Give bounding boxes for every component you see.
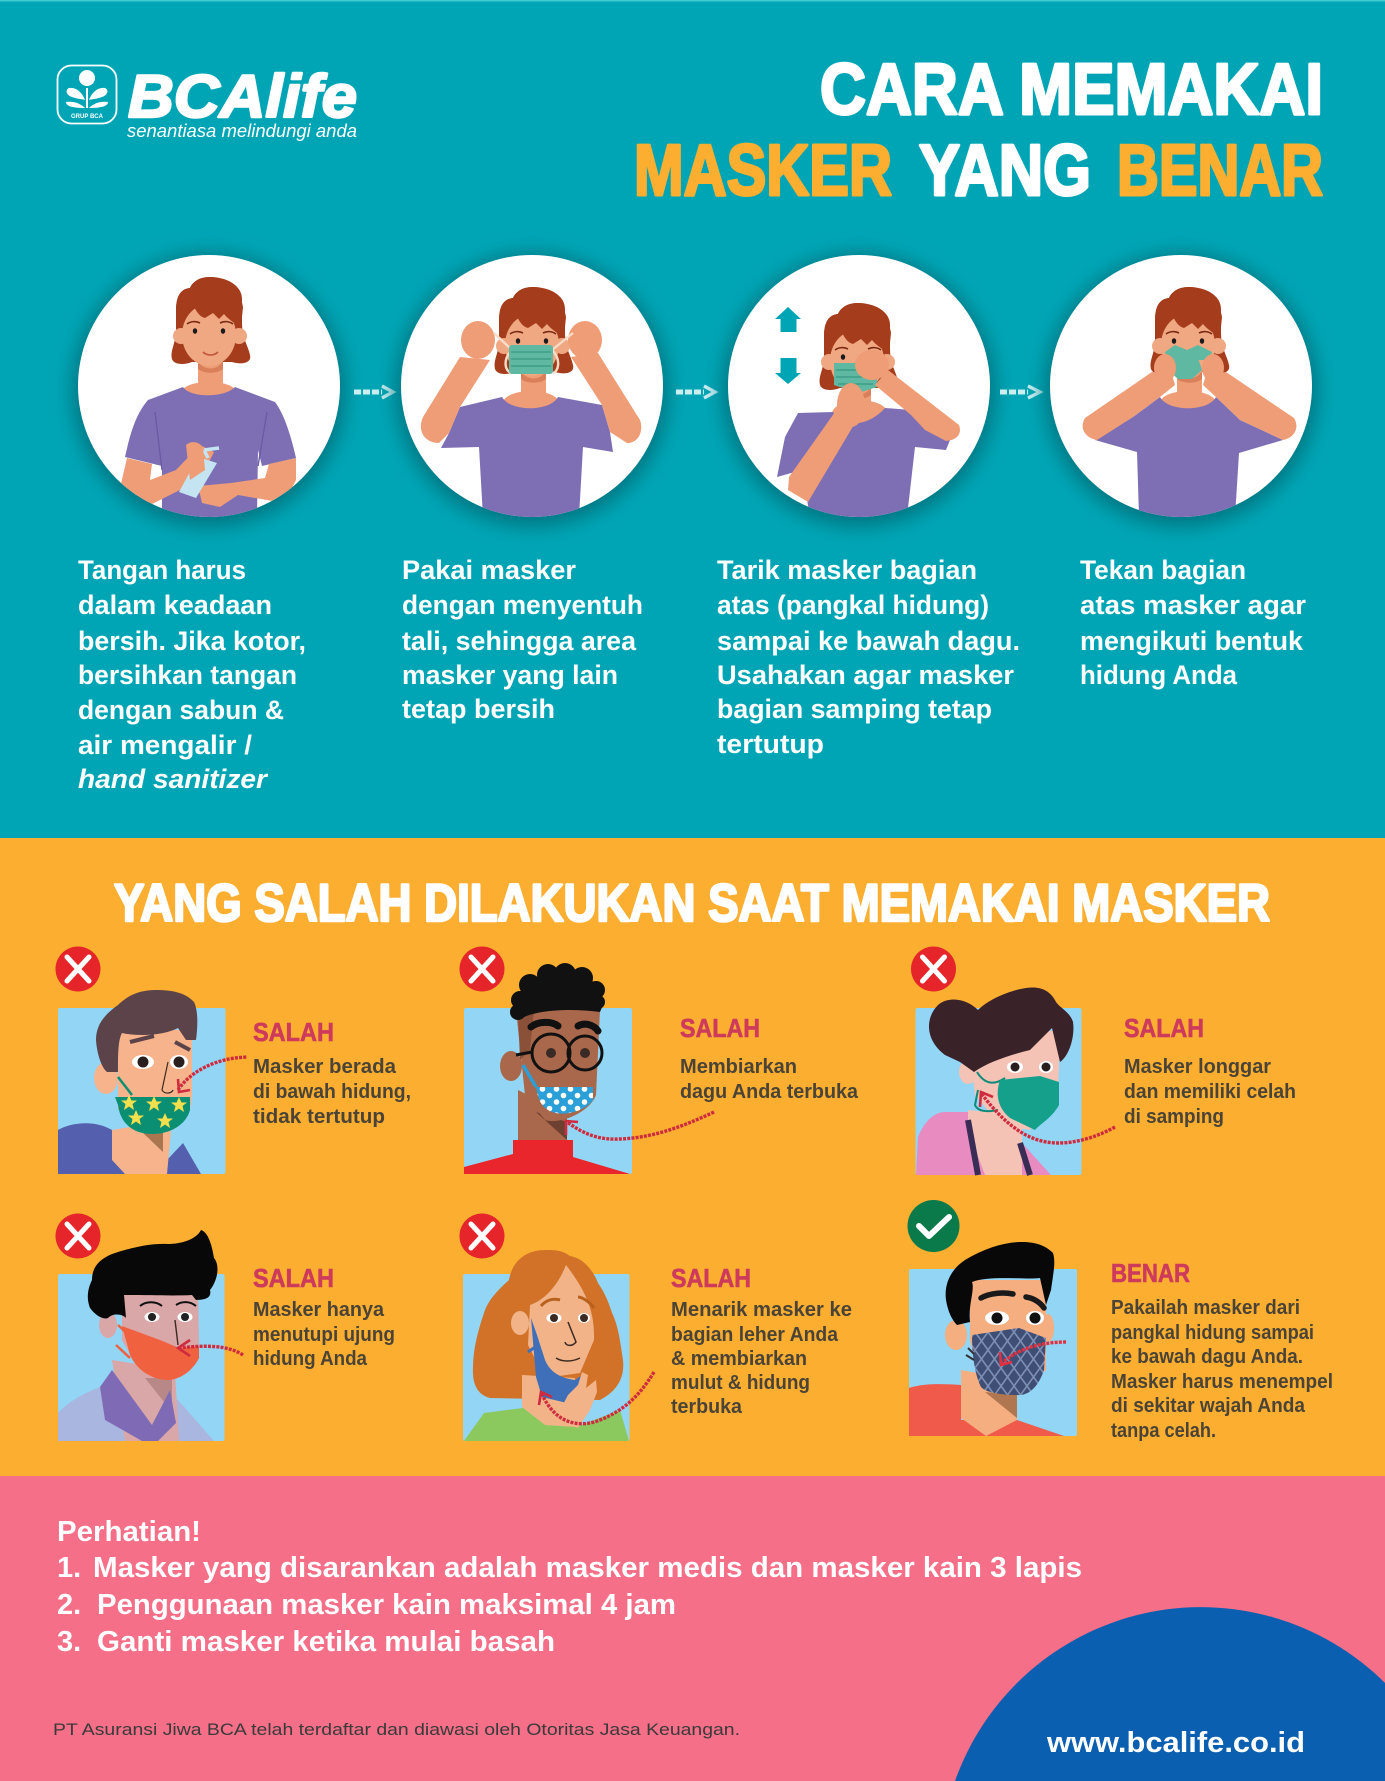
- label: salah 2: SALAH: [680, 1013, 760, 1043]
- step 4 text: hidung Anda: [1080, 660, 1238, 690]
- teal background: [0, 0, 1385, 838]
- step 2 text: tali, sehingga area: [402, 626, 637, 656]
- step 3 text: [717, 555, 1020, 759]
- blue corner shape: [955, 1607, 1385, 1781]
- step 2 text: tetap bersih: [402, 694, 555, 724]
- label: salah 1: Masker berada: [253, 1055, 397, 1078]
- step 1 text: bersihkan tangan: [78, 660, 297, 690]
- label: salah 5: SALAH: [671, 1263, 751, 1293]
- label: salah 2: Membiarkan: [680, 1055, 797, 1078]
- website: www.bcalife.co.id: [1046, 1727, 1305, 1759]
- panel 6: correct mask: [909, 1242, 1077, 1436]
- attention list: Masker yang disarankan adalah masker medis dan masker kain 3 lapis: [93, 1552, 1082, 1584]
- logo wordmark: BCAlife: [128, 63, 357, 130]
- label: benar: pangkal hidung sampai: [1111, 1321, 1314, 1344]
- arrow 1: [354, 386, 393, 398]
- label: salah 3: [1124, 1013, 1296, 1128]
- icon: BCA emblem: GRUP BCA: [71, 113, 103, 120]
- step 2 text: dengan menyentuh: [402, 590, 643, 620]
- step 3 text: atas (pangkal hidung): [717, 590, 989, 620]
- step 2 text: [402, 555, 643, 724]
- orange panel background: [0, 838, 1385, 1476]
- label: benar: Pakailah masker dari: [1111, 1296, 1300, 1319]
- attention list: Ganti masker ketika mulai basah: [97, 1626, 555, 1658]
- icon: wrong 4: [56, 1214, 100, 1258]
- title: YANG: [919, 131, 1091, 211]
- label: salah 4: Masker hanya: [253, 1298, 385, 1321]
- step 3 text: Tarik masker bagian: [717, 555, 977, 585]
- attention list: [57, 1516, 1082, 1658]
- label: salah 5: mulut & hidung: [671, 1371, 810, 1394]
- step 1 text: dalam keadaan: [78, 590, 272, 620]
- panel 2: chin open: [464, 963, 714, 1174]
- step 4 illustration: press nose: [1045, 254, 1317, 526]
- label: salah 3: dan memiliki celah: [1124, 1080, 1296, 1103]
- label: salah 3: di samping: [1124, 1105, 1224, 1128]
- step 3 text: tertutup: [717, 729, 824, 759]
- arrow 3: [1000, 386, 1040, 398]
- icon: BCA emblem: [58, 66, 116, 124]
- attention list: Perhatian!: [57, 1516, 201, 1548]
- icon: wrong 3: [911, 946, 956, 992]
- title: MASKER: [634, 131, 892, 211]
- attention list: 2.: [57, 1589, 81, 1621]
- step 3 text: sampai ke bawah dagu.: [717, 626, 1020, 656]
- icon: down arrow: [775, 358, 801, 384]
- panel 4: nose tip only: [58, 1230, 243, 1441]
- attention list: 3.: [57, 1626, 81, 1658]
- label: benar: [1111, 1258, 1333, 1442]
- pink footer panel: [0, 1476, 1385, 1781]
- step 1 illustration: clean hands: [73, 254, 345, 526]
- label: salah 4: [253, 1263, 395, 1370]
- icon: wrong 5: [460, 1214, 504, 1258]
- label: salah 1: tidak tertutup: [253, 1105, 385, 1128]
- step 1 text: Tangan harus: [78, 555, 246, 585]
- logo tagline: senantiasa melindungi anda: [127, 120, 357, 141]
- logo: BCA life: [58, 63, 357, 141]
- label: benar: di sekitar wajah Anda: [1111, 1394, 1306, 1417]
- label: salah 4: menutupi ujung: [253, 1323, 395, 1346]
- step 4 text: Tekan bagian: [1080, 555, 1246, 585]
- step 2 text: masker yang lain: [402, 660, 618, 690]
- label: salah 2: [680, 1013, 859, 1103]
- label: benar: BENAR: [1111, 1258, 1190, 1288]
- label: benar: Masker harus menempel: [1111, 1370, 1333, 1393]
- step 1 text: air mengalir /: [78, 730, 253, 760]
- label: salah 5: bagian leher Anda: [671, 1323, 839, 1346]
- icon: up arrow: [775, 307, 801, 332]
- label: salah 2: dagu Anda terbuka: [680, 1080, 859, 1103]
- icon: wrong 2: [460, 946, 504, 992]
- title: BENAR: [1117, 131, 1323, 211]
- step 3 illustration: pull mask: [723, 254, 995, 526]
- label: salah 4: hidung Anda: [253, 1347, 368, 1370]
- label: salah 1: [253, 1017, 411, 1128]
- legal note: PT Asuransi Jiwa BCA telah terdaftar dan diawasi oleh Otoritas Jasa Keuangan.: [53, 1720, 740, 1739]
- label: salah 3: SALAH: [1124, 1013, 1204, 1043]
- label: salah 1: SALAH: [253, 1017, 334, 1047]
- step 3 text: Usahakan agar masker: [717, 660, 1014, 690]
- label: benar: tanpa celah.: [1111, 1419, 1216, 1442]
- label: salah 5: Menarik masker ke: [671, 1298, 852, 1321]
- icon: wrong 1: [56, 946, 100, 992]
- label: benar: ke bawah dagu Anda.: [1111, 1345, 1303, 1368]
- label: salah 3: Masker longgar: [1124, 1055, 1271, 1078]
- step 4 text: atas masker agar: [1080, 590, 1307, 620]
- label: salah 5: & membiarkan: [671, 1347, 807, 1370]
- title: [634, 50, 1323, 211]
- attention list: Penggunaan masker kain maksimal 4 jam: [97, 1589, 676, 1621]
- step 2 text: Pakai masker: [402, 555, 576, 585]
- label: salah 4: SALAH: [253, 1263, 334, 1293]
- step 3 text: bagian samping tetap: [717, 694, 992, 724]
- step 1 text: [78, 555, 306, 794]
- step 1 text: hand sanitizer: [78, 764, 269, 794]
- icon: correct check: [908, 1200, 960, 1252]
- label: salah 5: terbuka: [671, 1395, 743, 1418]
- step 2 illustration: hold straps: [396, 254, 668, 526]
- title: CARA MEMAKAI: [820, 50, 1323, 130]
- attention list: 1.: [57, 1552, 81, 1584]
- arrow 2: [676, 386, 715, 398]
- label: salah 1: di bawah hidung,: [253, 1080, 411, 1103]
- panel 1: mask under nose: [58, 990, 247, 1174]
- label: salah 5: [671, 1263, 852, 1418]
- panel 5: mask on neck: [463, 1250, 654, 1441]
- step 1 text: dengan sabun &: [78, 695, 284, 725]
- step 4 text: [1080, 555, 1307, 690]
- step 1 text: bersih. Jika kotor,: [78, 626, 306, 656]
- step 4 text: mengikuti bentuk: [1080, 626, 1304, 656]
- panel 3: loose mask: [916, 988, 1115, 1175]
